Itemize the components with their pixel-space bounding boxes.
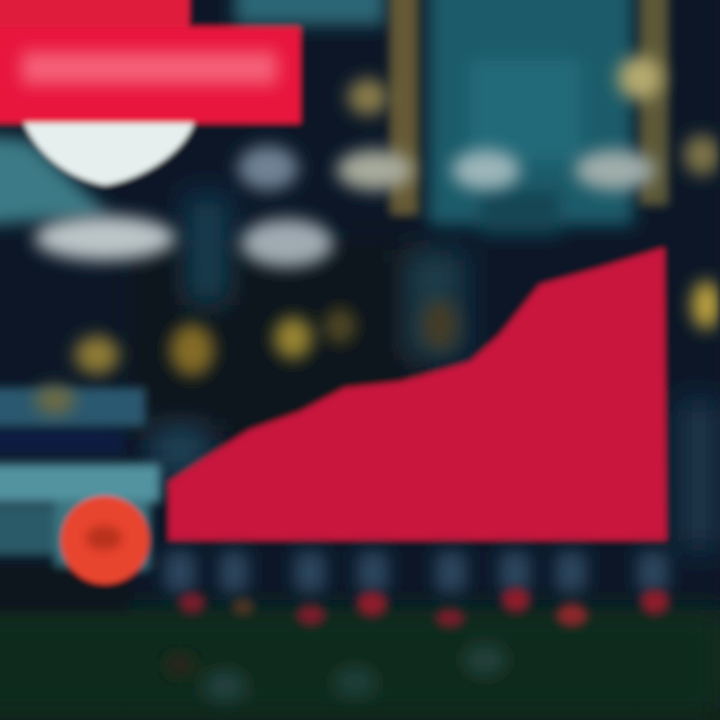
- gold window lights: [35, 56, 720, 414]
- banner top tab: [0, 0, 189, 28]
- white label blobs: [35, 146, 655, 267]
- footer faint blobs: [166, 644, 507, 702]
- lower-left building bands: [0, 388, 160, 610]
- header banner: [0, 0, 300, 185]
- teal mountain left: [0, 135, 110, 225]
- red area chart: [169, 248, 666, 540]
- banner text block: [22, 52, 277, 84]
- red circle badge: [61, 496, 149, 584]
- teal skyscraper: [235, 0, 633, 235]
- white semicircle: [24, 123, 194, 185]
- banner body: [0, 27, 300, 123]
- x-axis labels: [165, 552, 669, 627]
- gold tower columns: [390, 0, 668, 215]
